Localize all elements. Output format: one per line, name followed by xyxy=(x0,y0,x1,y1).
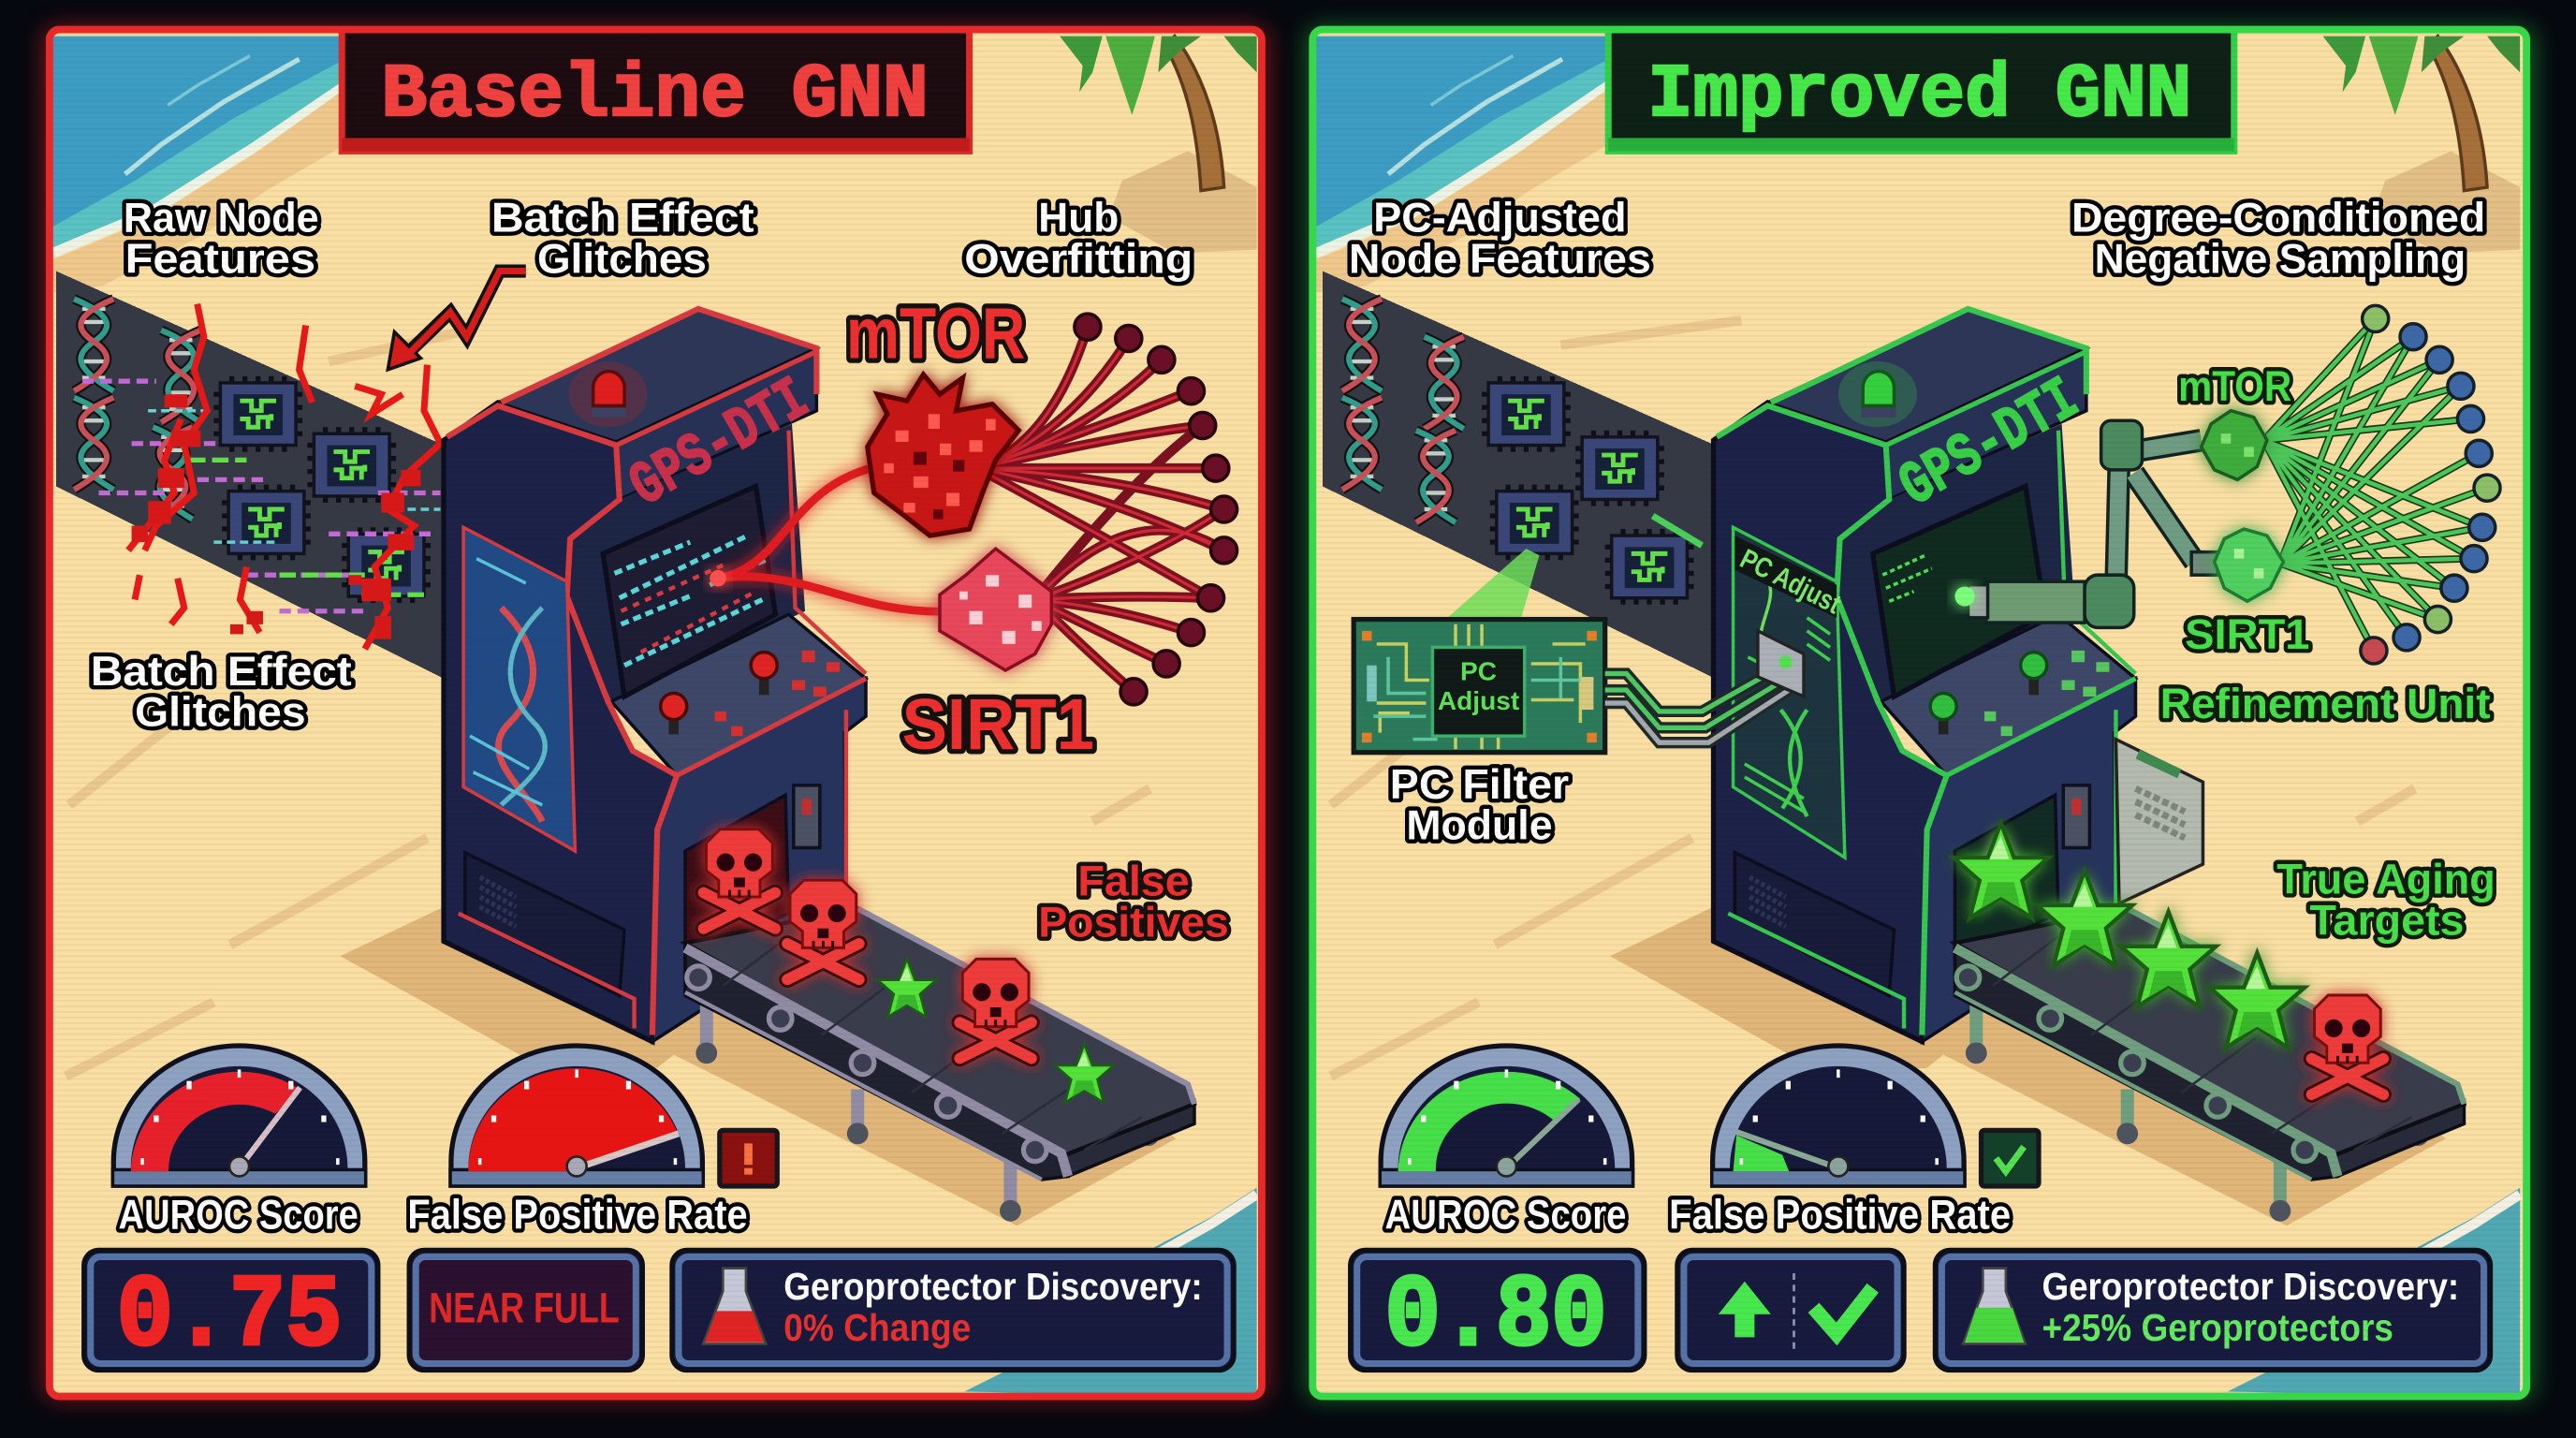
chip 4 xyxy=(1605,529,1693,605)
alarm light xyxy=(568,361,648,427)
arcade cabinet xyxy=(1714,309,2135,1042)
panel: baseline GNN xyxy=(43,26,1268,1400)
score value: 0.80 xyxy=(1385,1258,1606,1374)
label: True Aging Targets: True Aging xyxy=(2276,856,2496,903)
chip label: PC xyxy=(1460,656,1497,685)
label: Hub Overfitting: Overfitting xyxy=(964,235,1193,282)
skull false positive xyxy=(2312,995,2383,1094)
score box xyxy=(1351,1250,1645,1374)
status box xyxy=(1677,1250,1904,1371)
label: Raw Node Features xyxy=(124,194,319,282)
machine exit opening xyxy=(685,795,789,961)
chip 2 xyxy=(1575,431,1664,506)
arrow: batch effect glitches pointer xyxy=(400,271,526,361)
discovery value: +25% Geroprotectors xyxy=(2042,1306,2393,1349)
PC Adjust strip xyxy=(1734,536,1837,618)
hub nodes xyxy=(1075,314,1237,705)
label: Batch Effect Glitches lower xyxy=(91,648,352,736)
label: Degree-Conditioned Negative Sampling: Degree-Conditioned xyxy=(2071,194,2485,241)
title plate xyxy=(342,30,970,151)
label: Raw Node Features: Features xyxy=(125,235,315,282)
connection cables xyxy=(1605,662,1789,742)
DNA icon 3 xyxy=(1342,398,1382,490)
green filter beam xyxy=(1447,549,1539,618)
label: Hub Overfitting xyxy=(964,194,1193,282)
side poster xyxy=(1734,527,1846,858)
title plate xyxy=(1608,30,2234,151)
panel border xyxy=(50,30,1262,1397)
chip 1 xyxy=(1482,376,1571,452)
DNA icon 1 xyxy=(1342,299,1382,391)
ground shadow xyxy=(340,907,1177,1225)
skull false positive 3 xyxy=(959,959,1032,1059)
skull false positive 1 xyxy=(704,829,775,929)
label: True Aging Targets xyxy=(2276,856,2496,944)
DNA icon 4 xyxy=(153,427,193,520)
label: Hub Overfitting: Hub xyxy=(1038,194,1119,241)
gauge: AUROC xyxy=(1379,1043,1634,1188)
label: PC-Adjusted Node Features xyxy=(1349,194,1651,282)
discovery text: Geroprotector Discovery: xyxy=(783,1265,1203,1308)
star true target 3 xyxy=(2121,912,2216,1007)
shoreline bottom right xyxy=(2228,1188,2520,1398)
divider xyxy=(1793,1273,1794,1350)
panel border xyxy=(1312,30,2526,1397)
label: AUROC Score: AUROC Score xyxy=(1385,1192,1626,1239)
PC filter board xyxy=(1354,620,1605,753)
chip 1 xyxy=(213,376,302,452)
label: True Aging Targets: Targets xyxy=(2310,896,2464,944)
screen glow node xyxy=(710,570,726,586)
control deck xyxy=(1930,651,2109,736)
alarm light xyxy=(1838,361,1917,427)
label: PC Filter Module: PC Filter xyxy=(1390,761,1569,808)
hub wires xyxy=(718,327,1224,692)
fan wires xyxy=(2263,318,2487,651)
arrow head xyxy=(388,331,420,370)
side poster xyxy=(463,527,575,851)
cabinet screen xyxy=(603,486,775,697)
label: False Positives: False xyxy=(1077,857,1190,904)
star true target 4 xyxy=(2209,953,2305,1049)
status box xyxy=(409,1250,642,1371)
output conveyor xyxy=(685,908,1194,1211)
title text: Baseline GNN xyxy=(381,53,929,139)
icon: flask xyxy=(703,1269,766,1343)
panel glow xyxy=(1306,26,2535,1400)
DNA icon 2 xyxy=(161,330,200,422)
discovery text: Geroprotector Discovery: xyxy=(2042,1265,2459,1308)
water and shoreline xyxy=(1316,37,1608,292)
sand streaks xyxy=(66,329,1150,1076)
machine exit opening xyxy=(1954,795,2058,961)
label: Batch Effect Glitches lower: Batch Effect xyxy=(91,648,352,695)
icon: flask xyxy=(1963,1269,2026,1343)
score box xyxy=(84,1250,378,1374)
DNA icon 4 xyxy=(1416,431,1456,522)
DNA icon 3 xyxy=(74,398,113,490)
protein blob mTOR xyxy=(868,374,1018,536)
red glitch marks xyxy=(128,304,441,649)
noisy scan dashes xyxy=(82,381,441,611)
scanline overlay xyxy=(1312,30,2526,1397)
discovery box xyxy=(672,1250,1234,1371)
marquee text: GPS-DTI xyxy=(1889,366,2091,522)
check mark xyxy=(1814,1288,1873,1334)
label: mTOR: mTOR xyxy=(846,294,1025,374)
palm tree xyxy=(1060,37,1257,253)
up arrow xyxy=(1719,1282,1771,1337)
marquee text: GPS-DTI xyxy=(619,366,821,522)
protein blob mTOR xyxy=(2202,411,2267,479)
label: False Positives: Positives xyxy=(1038,898,1229,946)
label: PC-Adjusted Node Features: PC-Adjusted xyxy=(1373,194,1626,241)
server box xyxy=(2115,740,2203,903)
label: Degree-Conditioned Negative Sampling: Negative Sampling xyxy=(2095,235,2466,282)
chip label second line: Adjust xyxy=(1438,686,1519,715)
sand background xyxy=(50,30,1262,1397)
label: PC Filter Module: Module xyxy=(1406,802,1553,849)
protein blob SIRT1 xyxy=(2215,529,2283,601)
chip 4 xyxy=(342,527,431,603)
arcade cabinet xyxy=(444,309,866,1042)
data conveyor strip xyxy=(1323,271,1715,679)
label: PC Filter Module xyxy=(1390,761,1569,849)
sand background xyxy=(1312,30,2526,1397)
label: Raw Node Features: Raw Node xyxy=(124,194,319,241)
alarm indicator xyxy=(720,1130,777,1186)
skull false positive 2 xyxy=(787,880,859,979)
title text: Improved GNN xyxy=(1647,53,2191,139)
discovery box xyxy=(1935,1250,2491,1371)
label: SIRT1: SIRT1 xyxy=(2185,610,2310,658)
star true target 1 xyxy=(1954,823,2048,918)
DNA icon 2 xyxy=(1425,337,1464,429)
panel: improved GNN xyxy=(1306,26,2535,1400)
label: False Positive Rate: False Positive Rate xyxy=(1669,1192,2011,1239)
chip 2 xyxy=(307,427,396,503)
label: False Positive Rate: False Positive Rate xyxy=(407,1192,748,1239)
panel glow xyxy=(43,26,1268,1400)
chip 3 xyxy=(222,485,311,560)
status text: NEAR FULL xyxy=(429,1284,620,1332)
label: mTOR: mTOR xyxy=(2178,362,2291,410)
star true target 1 xyxy=(877,959,936,1018)
label: Batch Effect Glitches top: Glitches xyxy=(537,235,707,282)
DNA icon 1 xyxy=(74,299,113,391)
data conveyor strip xyxy=(56,271,444,679)
output conveyor xyxy=(1954,908,2464,1211)
chip 3 xyxy=(1490,485,1579,560)
control deck xyxy=(661,651,840,736)
label: Degree-Conditioned Negative Sampling xyxy=(2071,194,2485,282)
PC Adjust label: PC Adjust xyxy=(1735,543,1846,620)
label: Refinement Unit: Refinement Unit xyxy=(2160,680,2491,727)
green trace xyxy=(1653,516,1702,546)
gauge: false positive rate xyxy=(1710,1043,1967,1188)
gauge: AUROC xyxy=(111,1043,367,1188)
label: Batch Effect Glitches top: Batch Effect xyxy=(491,194,754,241)
label: SIRT1: SIRT1 xyxy=(902,684,1094,765)
water and shoreline xyxy=(52,37,345,292)
label: PC-Adjusted Node Features: Node Features xyxy=(1349,235,1651,282)
score value: 0.75 xyxy=(117,1258,342,1374)
discovery value: 0% Change xyxy=(783,1306,971,1349)
scanline overlay xyxy=(50,30,1262,1397)
label: False Positives xyxy=(1038,857,1229,946)
refinement nodes xyxy=(2361,305,2500,664)
check indicator xyxy=(1982,1130,2039,1186)
cabinet screen xyxy=(1873,486,2045,697)
label: AUROC Score: AUROC Score xyxy=(119,1192,359,1239)
label: Batch Effect Glitches lower: Glitches xyxy=(135,689,306,736)
gauge: false positive rate xyxy=(448,1043,705,1188)
ground shadow xyxy=(1610,907,2446,1225)
palm tree xyxy=(2323,37,2520,253)
arrow line xyxy=(404,271,526,359)
star true target 2 xyxy=(2037,871,2132,966)
protein blob SIRT1 xyxy=(940,549,1051,670)
star true target 2 xyxy=(1055,1044,1114,1103)
shoreline bottom right xyxy=(964,1188,1257,1398)
robot arm xyxy=(1954,420,2217,627)
sand streaks xyxy=(1331,320,2415,1076)
label: Batch Effect Glitches top xyxy=(491,194,754,282)
cabinet socket xyxy=(1758,631,1804,697)
